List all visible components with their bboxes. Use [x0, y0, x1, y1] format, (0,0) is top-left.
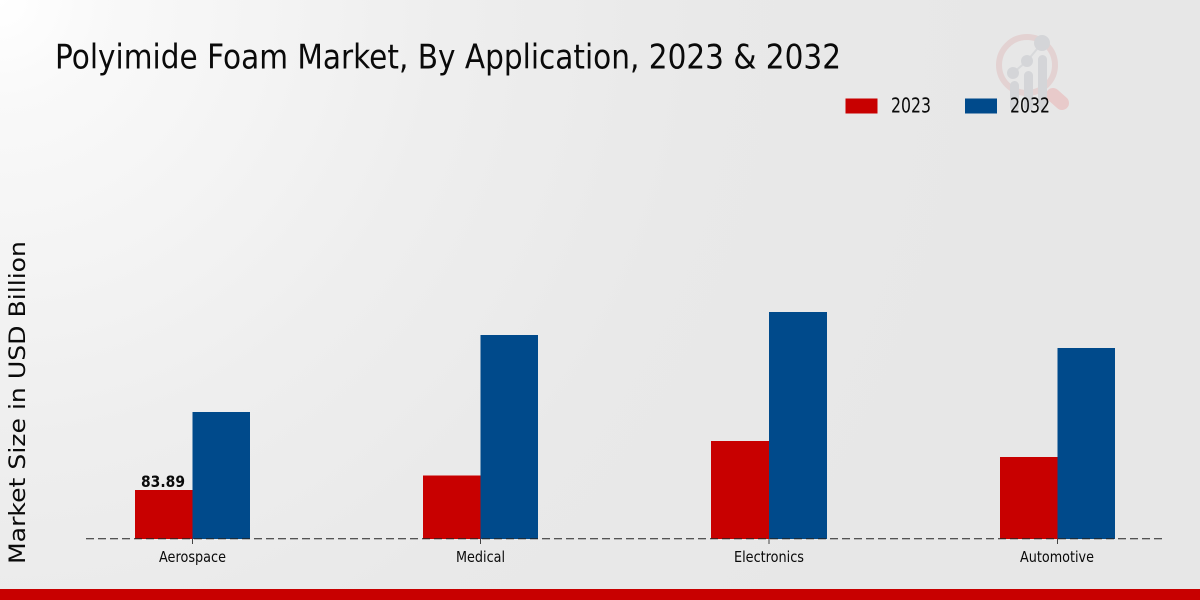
category labels — [159, 548, 1094, 566]
bar chart — [86, 312, 1164, 566]
bars: Electronics — [711, 312, 827, 539]
legend item: 2023 — [846, 94, 931, 118]
y axis title: Market Size in USD Billion — [5, 241, 31, 564]
legend — [846, 94, 1050, 118]
category labels: Medical — [456, 548, 505, 566]
bars: Automotive — [1000, 348, 1115, 539]
category labels: Automotive — [1020, 548, 1094, 566]
bars: Aerospace — [135, 412, 250, 539]
legend item: 2032: 2032 — [1010, 94, 1050, 118]
legend item: 2032 — [965, 94, 1050, 118]
category labels: Aerospace — [159, 548, 226, 566]
category labels: Electronics — [734, 548, 804, 566]
title: Polyimide Foam Market, By Application, 2023 & 2032 — [55, 38, 841, 78]
icon: watermark logo — [999, 35, 1062, 111]
footer bar — [0, 589, 1200, 600]
bars: Medical — [423, 335, 538, 539]
data label: 83.89 — [141, 472, 185, 491]
legend item: 2023: 2023 — [891, 94, 931, 118]
